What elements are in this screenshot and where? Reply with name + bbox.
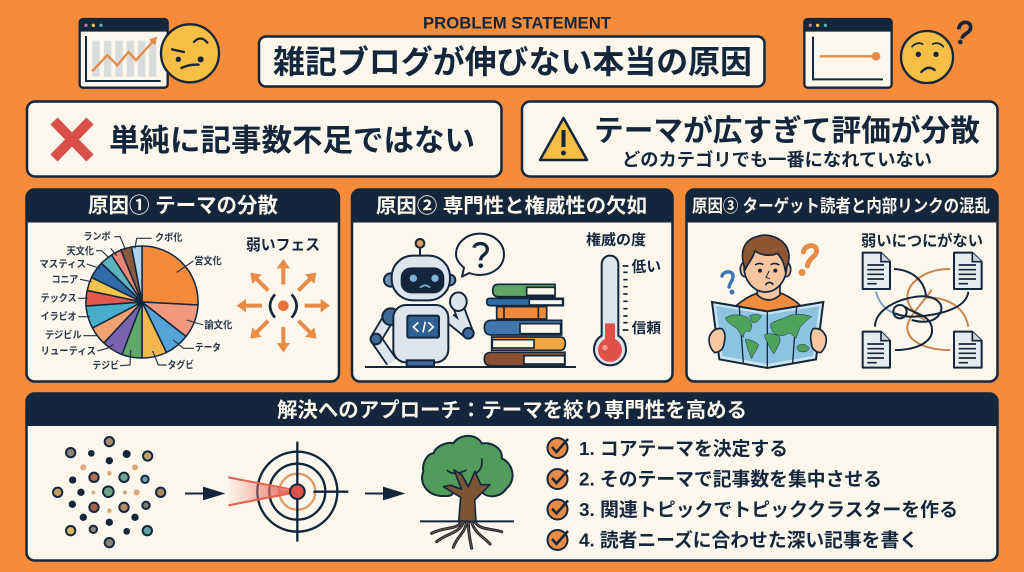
panel: cause 1 [26, 190, 339, 382]
arrow: dots to target [185, 488, 222, 499]
title: 雑記ブログが伸びない本当の原因 [273, 44, 752, 80]
icon: stack of books [484, 284, 565, 366]
item 1: 1. コアテーマを決定する [579, 438, 788, 459]
heading: solution: 解決へのアプローチ：テーマを絞り専門性を高める [277, 398, 747, 422]
chart labels: タグビ [168, 358, 194, 371]
document bottom left [863, 332, 890, 368]
heading: no connection: 弱いにつにがない [861, 231, 983, 250]
dot: orange question mark [798, 269, 806, 276]
chart labels: 営文化 [194, 254, 222, 267]
arrow: target to tree [365, 488, 402, 499]
icon: question bubble [456, 234, 504, 277]
icon: blue question mark [722, 272, 733, 287]
icon: red cross [54, 121, 90, 158]
icon: person reading a map [709, 235, 826, 368]
panel: cause 2 [352, 190, 672, 382]
icon: rising chart window with skeptical face [80, 19, 219, 88]
document bottom right [954, 332, 982, 368]
item 2: 2. そのテーマで記事数を集中させる [579, 468, 882, 490]
icon: thermometer: 低い [632, 259, 661, 276]
document top left [863, 253, 890, 289]
chart labels: 天文化 [67, 244, 94, 257]
icon: thermometer [594, 256, 661, 365]
icons: documents [863, 253, 982, 368]
heading: cause 2: 原因② 専門性と権威性の欠如 [376, 194, 647, 218]
icon: tree [420, 436, 514, 548]
panel: cause 3 [686, 190, 998, 382]
item 3: 3. 関連トピックでトピッククラスターを作る [579, 499, 958, 520]
icon: thermometer: 信頼 [632, 320, 661, 336]
heading: weak festival: 弱いフェス [246, 237, 320, 254]
text: not number one: どのカテゴリでも一番になれていない [622, 149, 932, 170]
chart labels: コニア [52, 274, 78, 286]
diagram: tangled links [875, 269, 968, 350]
chart labels: クボ化 [155, 232, 182, 244]
icon: warning triangle [540, 118, 587, 160]
chart labels: 諭文化 [204, 319, 232, 332]
heading: authority: 権威の度 [586, 231, 647, 249]
chart labels: テジビル [45, 329, 82, 342]
heading: cause 1: 原因① テーマの分散 [88, 194, 278, 218]
chart labels: リューティス [41, 346, 96, 358]
text: not article count: 単純に記事数不足ではない [109, 124, 475, 158]
icon: flat chart window with confused face [804, 19, 971, 88]
panel: not article count [27, 102, 502, 176]
item 4: 4. 読者ニーズに合わせた深い記事を書く [579, 528, 918, 550]
title [259, 36, 764, 86]
icon: scattered dots [53, 437, 165, 547]
panel: solution [26, 394, 998, 560]
icon: orange question mark [804, 246, 817, 266]
icon: target with beam [228, 442, 348, 542]
chart labels: ランボ [83, 231, 111, 243]
dot: blue question mark [730, 290, 734, 294]
panel: theme too broad [522, 102, 998, 176]
icon: dispersing arrows [237, 259, 330, 352]
label: problem statement: PROBLEM STATEMENT [423, 14, 611, 32]
checklist [548, 438, 958, 550]
document top right [954, 253, 982, 289]
chart labels: テジビ [92, 359, 119, 372]
heading: cause 3: 原因③ ターゲット読者と内部リンクの混乱 [692, 196, 990, 216]
chart labels: テータ [195, 342, 221, 354]
chart labels: マスティス [39, 259, 86, 271]
chart: pie [86, 246, 198, 358]
chart labels: テックス [41, 292, 77, 304]
chart labels [39, 231, 232, 372]
text: theme too broad: テーマが広すぎて評価が分散 [594, 114, 980, 148]
icon: confused robot [365, 239, 576, 367]
chart labels: イラビオ [41, 310, 77, 323]
